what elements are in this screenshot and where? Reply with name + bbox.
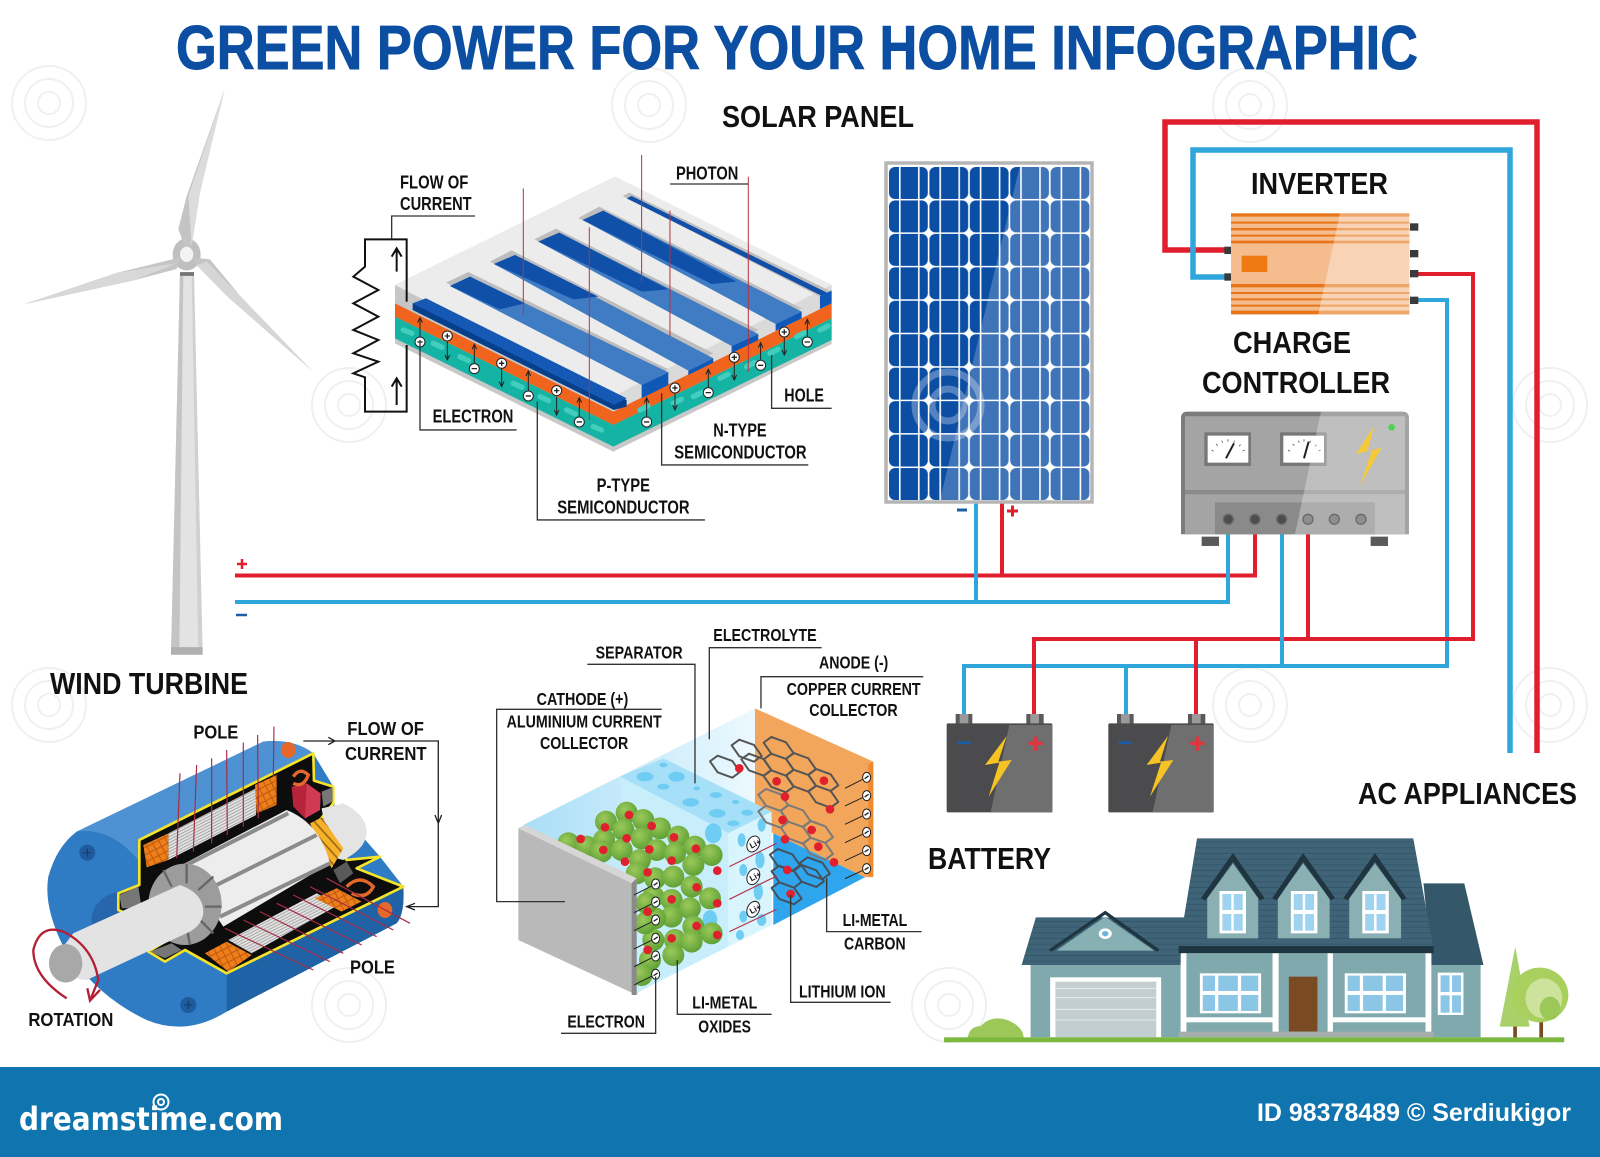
- footer: image id: ID 98378489 © Serdiukigor: [1257, 1099, 1571, 1127]
- label: electron: ELECTRON: [567, 1011, 645, 1031]
- label: p-type semiconductor: [557, 475, 690, 517]
- icon: wind turbine: [24, 89, 312, 655]
- label: pole top: POLE: [193, 721, 238, 742]
- label: cathode: [507, 689, 662, 753]
- heading: inverter: INVERTER: [1251, 166, 1388, 201]
- label: li-metal carbon: [843, 910, 908, 953]
- label: photon: PHOTON: [676, 162, 738, 183]
- dormers: [1203, 857, 1404, 938]
- li+ ions and migration arrows: Li+: [748, 837, 763, 851]
- panel: generator diagram: [28, 718, 442, 1030]
- icon: charge controller: [1181, 412, 1409, 546]
- cathode aluminium collector: [518, 825, 637, 995]
- footer bar: [0, 1067, 1600, 1157]
- label: flow of current: FLOW OF: [347, 718, 424, 739]
- bush and trees: [968, 947, 1568, 1038]
- panel: solar cell diagram: [353, 155, 832, 520]
- label: cathode: ALUMINIUM CURRENT: [507, 712, 662, 732]
- wiring: all power cables: [235, 122, 1537, 753]
- footer: spiral mark: [154, 1094, 168, 1110]
- footer: dreamstime logo: dreamstime.com: [19, 1100, 283, 1138]
- label: cathode: CATHODE (+): [537, 689, 628, 709]
- label: flow of current: [345, 718, 427, 764]
- icon: resistor circuit: [353, 239, 407, 412]
- panel: lithium ion cell diagram: [497, 625, 923, 1036]
- generator rotor and shaft: [49, 742, 392, 983]
- label: n-type semiconductor: N-TYPE: [713, 420, 767, 441]
- heading: battery: BATTERY: [928, 841, 1051, 876]
- label: electron: ELECTRON: [433, 406, 513, 427]
- label: pole bottom: POLE: [350, 956, 395, 977]
- label: flow of current: FLOW OF: [400, 171, 468, 192]
- magnetic field lines: [177, 727, 410, 970]
- label: separator: SEPARATOR: [596, 642, 683, 662]
- heading: charge controller: CONTROLLER: [1202, 365, 1390, 400]
- icon: house: [944, 838, 1568, 1042]
- label: li-metal carbon: CARBON: [844, 933, 906, 953]
- icon: battery one: [947, 714, 1052, 812]
- label: li-metal oxides: LI-METAL: [692, 993, 758, 1013]
- li+ ions and migration arrows: [729, 834, 777, 932]
- icon: battery two: [1108, 714, 1214, 812]
- label: anode: COPPER CURRENT: [787, 679, 921, 699]
- label: anode: [787, 653, 921, 720]
- label: n-type semiconductor: [674, 420, 807, 462]
- heading: charge controller: CHARGE: [1233, 325, 1351, 360]
- walls: [1031, 953, 1481, 1037]
- label: flow of current: CURRENT: [400, 193, 472, 214]
- icon: inverter: [1224, 213, 1418, 314]
- generator housing: [47, 741, 404, 1027]
- red lithium ions: [576, 764, 838, 954]
- heading: charge controller: [1202, 325, 1390, 400]
- heading: solar panel: SOLAR PANEL: [722, 99, 914, 134]
- label: p-type semiconductor: P-TYPE: [597, 475, 650, 496]
- leader lines: [497, 648, 923, 1033]
- label: anode: COLLECTOR: [809, 700, 898, 720]
- garage gable and door: [1050, 913, 1161, 1037]
- label: cathode: COLLECTOR: [540, 733, 629, 753]
- carbon lattice: [710, 737, 838, 904]
- green li-metal oxide spheres: [557, 802, 723, 986]
- label: electrolyte: ELECTROLYTE: [713, 625, 817, 645]
- label: flow of current: [400, 171, 472, 214]
- arrow: rotation: [33, 930, 100, 1001]
- charges: electrons and holes: [415, 318, 812, 427]
- generator cutaway: [118, 753, 403, 973]
- label: li-metal oxides: [692, 993, 758, 1036]
- label: anode: ANODE (-): [819, 653, 888, 673]
- label: li-metal oxides: OXIDES: [698, 1016, 751, 1036]
- label: li-metal carbon: LI-METAL: [843, 910, 908, 930]
- label: flow of current: CURRENT: [345, 743, 427, 764]
- label: rotation: ROTATION: [28, 1009, 113, 1030]
- li+ ions and migration arrows: Li+: [748, 870, 763, 883]
- electrolyte housing: [523, 708, 873, 995]
- porch columns and windows: [1179, 953, 1463, 1037]
- ground: [944, 1037, 1564, 1042]
- separator block: [620, 758, 772, 993]
- label: n-type semiconductor: SEMICONDUCTOR: [674, 441, 807, 462]
- label: hole: HOLE: [784, 385, 824, 406]
- leader lines: [392, 184, 832, 520]
- label: p-type semiconductor: SEMICONDUCTOR: [557, 496, 690, 517]
- heading: wind turbine: WIND TURBINE: [50, 666, 248, 701]
- solar cell body: [395, 177, 832, 452]
- li+ ions and migration arrows: Li+: [748, 902, 763, 916]
- photon rays: [523, 155, 748, 420]
- arrow: flow of current: [303, 737, 442, 910]
- electrons and arrows: [634, 772, 871, 985]
- icon: solar panel: [886, 163, 1092, 502]
- label: lithium ion: LITHIUM ION: [799, 981, 886, 1001]
- roofs: [1022, 838, 1483, 965]
